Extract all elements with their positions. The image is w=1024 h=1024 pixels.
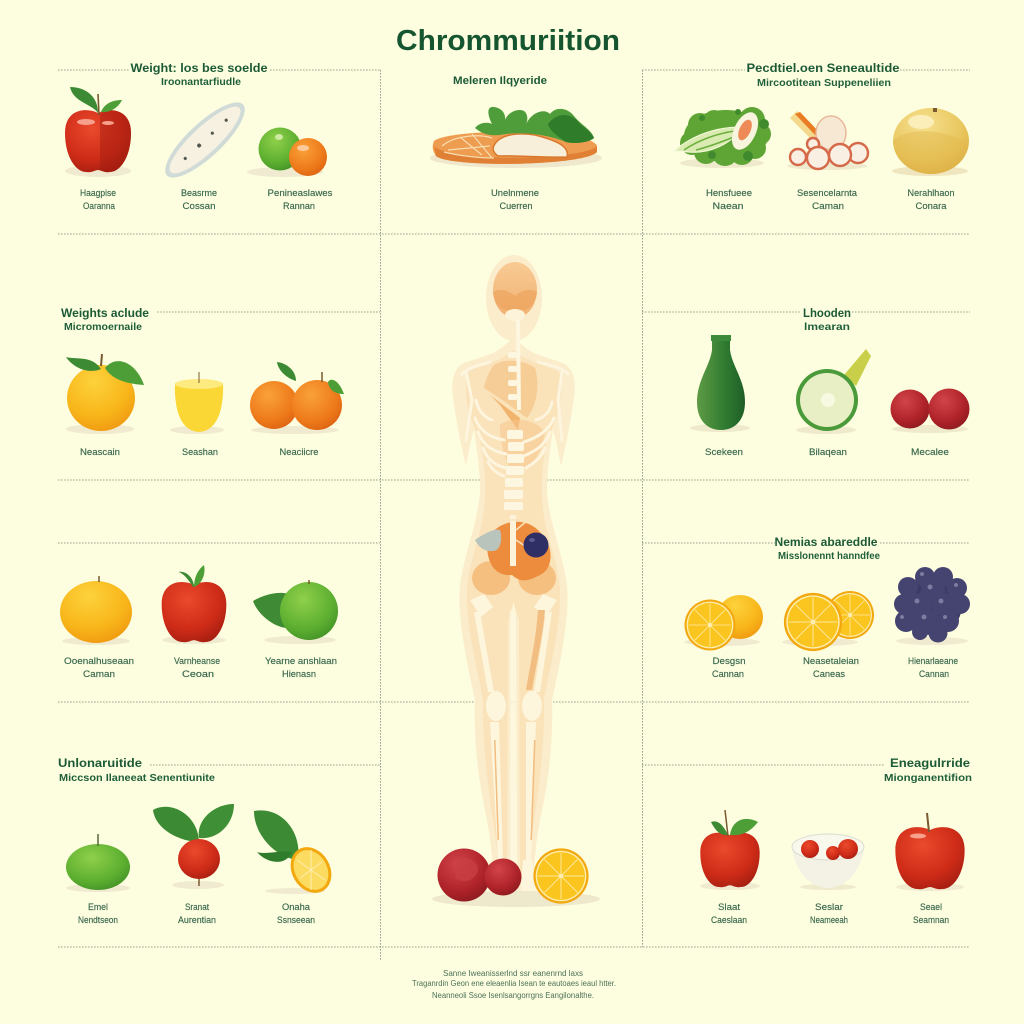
food labels: Desgsn xyxy=(712,656,746,667)
heading: Lhooden xyxy=(803,306,851,320)
food labels: Caman xyxy=(812,201,844,212)
panel: second row left xyxy=(61,306,344,458)
food label xyxy=(491,188,539,212)
food labels: Rannan xyxy=(283,201,315,212)
icon: lettuce xyxy=(674,107,771,168)
head xyxy=(493,262,537,321)
heading: Nemias abareddle xyxy=(774,535,878,549)
panel: third row right xyxy=(684,535,970,680)
food labels xyxy=(705,447,949,458)
food labels: Hienasn xyxy=(282,669,316,680)
leg bones xyxy=(470,594,557,897)
food labels: Penineaslawes xyxy=(268,188,333,199)
panel: second row right xyxy=(690,306,970,458)
food labels: Aurentian xyxy=(178,915,216,926)
food labels: Scekeen xyxy=(705,447,743,458)
food labels: Yearne anshlaan xyxy=(265,656,337,667)
icon: red apple xyxy=(162,565,226,644)
food labels: Emel xyxy=(88,902,108,913)
food labels: Haagpise xyxy=(80,188,116,199)
icon: yellow orange fruit xyxy=(66,354,144,434)
heading: lmearan xyxy=(804,321,850,333)
icon: plate xyxy=(155,92,255,188)
food labels: Beasrme xyxy=(181,188,217,199)
panel: third row left xyxy=(60,565,338,680)
footer note xyxy=(412,969,616,1000)
heading: Eneagulrride xyxy=(890,756,970,770)
food labels: Slaat xyxy=(718,902,740,913)
panel: central body figure xyxy=(452,255,575,897)
spine xyxy=(504,320,524,510)
panel: top left foods xyxy=(65,61,333,212)
food labels xyxy=(712,656,958,680)
icon: lemon cup xyxy=(170,372,224,434)
heading xyxy=(803,306,851,333)
heading xyxy=(746,61,900,89)
pelvis and organs xyxy=(472,515,556,595)
icon: cherry with leaves xyxy=(153,804,234,889)
icon: red berries xyxy=(890,388,970,433)
food labels: Sranat xyxy=(185,902,209,913)
icon: red apple xyxy=(65,87,131,177)
icon: green bottle xyxy=(690,335,750,432)
body silhouette xyxy=(452,255,575,897)
icon: yellow melon xyxy=(892,108,969,176)
icon: green fruit with leaf xyxy=(253,580,338,644)
food labels: Cannan xyxy=(712,669,744,680)
icon: blackberries xyxy=(894,567,970,645)
icon: lime and orange xyxy=(247,128,327,177)
food labels: Neameeah xyxy=(810,915,848,926)
icon: green apple xyxy=(66,834,130,892)
food labels: Seael xyxy=(920,902,942,913)
panel: top middle dish xyxy=(430,75,602,212)
food labels: Ceoan xyxy=(182,669,214,680)
food labels: Hienarlaeane xyxy=(908,656,958,667)
heading: Mircootitean Suppeneliien xyxy=(757,77,891,89)
icon: red apple xyxy=(700,810,760,890)
heading: Misslonennt hanndfee xyxy=(778,550,880,562)
icon: salad plate xyxy=(430,107,602,168)
food labels xyxy=(64,656,337,680)
food labels: Neaciicre xyxy=(280,447,318,458)
heading: Weight: los bes soelde xyxy=(130,61,268,75)
footer note: Sanne Iweanisserlnd ssr eanenrnd laxs xyxy=(443,969,583,978)
ribs xyxy=(462,362,568,476)
food labels: Ooenalhuseaan xyxy=(64,656,134,667)
icon: fruit at the feet xyxy=(432,848,600,907)
heading: Weights aclude xyxy=(61,306,149,320)
food labels: Onaha xyxy=(282,902,311,913)
icon: shrimp rolls xyxy=(787,111,868,170)
heading xyxy=(130,61,268,88)
food labels: Seamnan xyxy=(913,915,949,926)
heading: Mionganentifion xyxy=(884,772,972,784)
icon: bowl of cherries xyxy=(792,834,864,890)
food labels: Bilaqean xyxy=(809,447,847,458)
food labels xyxy=(80,447,318,458)
icon: oranges xyxy=(250,362,344,434)
icon: red apple xyxy=(895,813,965,891)
heading xyxy=(61,306,149,333)
heading: Micromoernaile xyxy=(64,321,142,333)
food labels: Cossan xyxy=(182,201,216,212)
footer note: Traganrdin Geon ene eleaenlia Isean te eautoaes ieaul htter. xyxy=(412,979,616,988)
food labels: Naean xyxy=(712,201,744,212)
food labels: Seslar xyxy=(815,902,843,913)
food labels: Nendtseon xyxy=(78,915,118,926)
food labels: Conara xyxy=(916,201,947,212)
heading: Unlonaruitide xyxy=(58,756,142,770)
heading xyxy=(58,756,215,784)
food labels xyxy=(78,902,315,926)
food labels: Varnheanse xyxy=(174,656,220,667)
food labels xyxy=(80,188,333,212)
thigh and shin shading xyxy=(494,610,545,840)
food labels: Caman xyxy=(83,669,115,680)
panel: bottom left xyxy=(58,756,339,926)
heading xyxy=(774,535,880,562)
heading: Iroonantarfiudle xyxy=(161,76,241,88)
food labels: Ssnseean xyxy=(277,915,315,926)
icon: cucumber slice xyxy=(796,349,871,434)
food labels: Hensfueee xyxy=(706,188,752,199)
icon: lemons xyxy=(684,595,763,650)
food label: Cuerren xyxy=(500,201,532,212)
title: Chrommuriition xyxy=(396,25,620,57)
heading xyxy=(884,756,972,784)
food labels: Neasetaleian xyxy=(803,656,859,667)
icon: lemon with leaves xyxy=(254,810,339,900)
food labels: Neascain xyxy=(80,447,120,458)
food labels: Nerahlhaon xyxy=(908,188,954,199)
food labels: Sesencelarnta xyxy=(797,188,858,199)
heading: Pecdtiel.oen Seneaultide xyxy=(746,61,900,75)
torso organs xyxy=(484,361,545,468)
food labels xyxy=(706,188,954,212)
footer note: Neanneoli Ssoe Isenlsangorrgns Eangilonalthe. xyxy=(432,991,594,1000)
food labels: Caneas xyxy=(813,669,845,680)
icon: yellow fruit xyxy=(60,576,132,645)
food labels: Oaranna xyxy=(83,201,116,212)
panel: bottom right xyxy=(700,756,972,926)
heading: Meleren Ilqyeride xyxy=(453,75,547,87)
icon: orange slices xyxy=(782,591,874,651)
food labels: Mecalee xyxy=(911,447,949,458)
food labels: Caeslaan xyxy=(711,915,747,926)
food labels: Cannan xyxy=(919,669,949,680)
skin layer xyxy=(466,350,561,880)
food labels xyxy=(711,902,949,926)
heading: Miccson Ilaneeat Senentiunite xyxy=(59,772,215,784)
food labels: Seashan xyxy=(182,447,218,458)
panel: top right foods xyxy=(674,61,969,212)
food label: Unelnmene xyxy=(491,188,539,199)
